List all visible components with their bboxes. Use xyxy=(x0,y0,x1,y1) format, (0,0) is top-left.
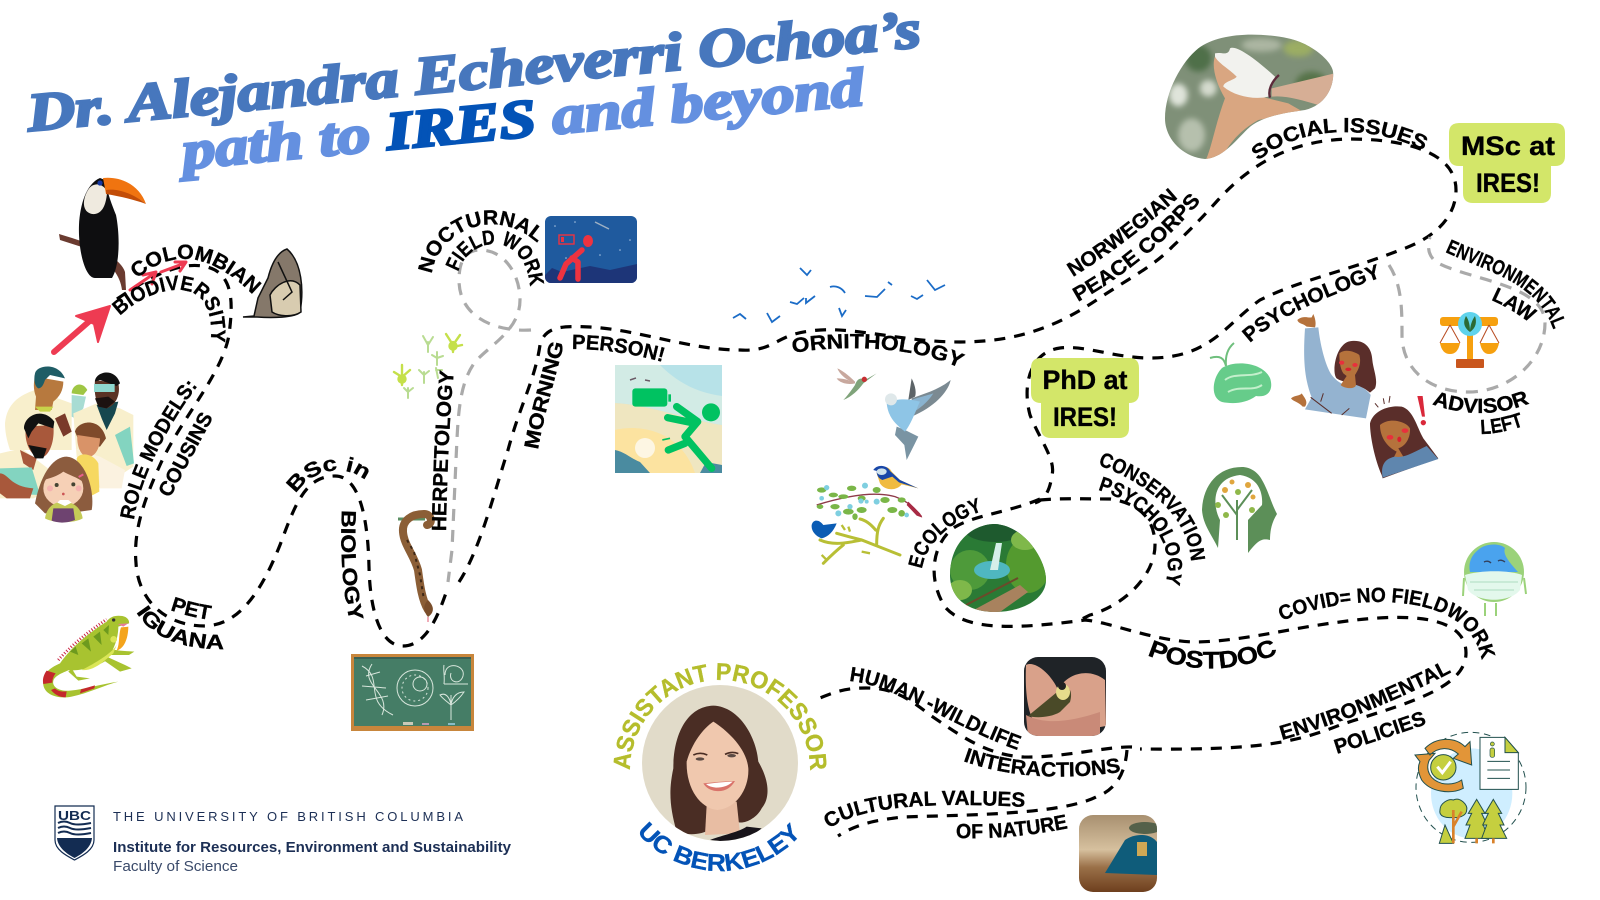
icon: scales of justice xyxy=(1440,312,1499,368)
icon: hummingbird xyxy=(837,368,877,400)
figure: surprised woman xyxy=(1370,396,1438,478)
label: PhD at IRES xyxy=(1031,358,1139,438)
labels along the path: PET xyxy=(171,596,212,620)
labels along the path: COLOMBIAN xyxy=(131,244,262,294)
labels along the path: COUSINS xyxy=(160,412,212,496)
labels along the path: HUMAN -WILDLIFE xyxy=(850,666,1022,750)
icon: exclamation mark xyxy=(1417,396,1426,425)
labels along the path: COVID= NO FIELDWORK xyxy=(1278,588,1496,660)
image: waterfall xyxy=(950,524,1046,612)
arrow: big red xyxy=(54,262,186,352)
image: bird in hands xyxy=(1024,657,1106,736)
label: MSc at IRES: MSc at xyxy=(1461,131,1555,161)
labels along the path: PSYCHOLOGY xyxy=(1098,476,1182,586)
labels along the path: ENVIRONMENTAL xyxy=(1446,239,1564,330)
icon: tree head xyxy=(1202,467,1277,553)
labels along the path: BSc in xyxy=(286,456,369,492)
faculty: Faculty of Science xyxy=(113,858,238,875)
icon: toucan xyxy=(59,178,146,290)
illustration: birds on branch xyxy=(812,466,922,563)
labels along the path: OF NATURE xyxy=(956,814,1068,838)
shield xyxy=(55,806,94,860)
labels along the path: ECOLOGY xyxy=(908,498,978,568)
label: UC Berkeley: UC BERKELEY xyxy=(640,822,798,872)
shield: UBC xyxy=(58,808,92,823)
icon: anteater xyxy=(243,249,302,317)
labels along the path: FIELD WORK xyxy=(445,230,544,287)
icon: chalkboard xyxy=(351,654,474,731)
labels along the path: NOCTURNAL xyxy=(418,210,540,273)
icon: earth with mask xyxy=(1463,542,1526,616)
icon: iguana xyxy=(43,616,134,697)
portrait: Alejandra xyxy=(640,683,800,843)
image: nocturnal fieldwork xyxy=(545,216,637,283)
title xyxy=(23,0,923,181)
labels along the path: ADVISOR xyxy=(1432,392,1530,414)
image: raised hands xyxy=(1165,34,1334,159)
labels along the path: CONSERVATION xyxy=(1100,453,1206,561)
labels along the path: BIODIVERSITY xyxy=(111,275,226,342)
labels along the path: LEFT xyxy=(1481,412,1520,434)
labels along the path: LAW xyxy=(1492,287,1538,321)
arrow: small red 1 xyxy=(130,272,156,290)
institute name: Institute for Resources, Environment and Sustainability xyxy=(113,839,512,856)
labels along the path: INTERACTIONS xyxy=(964,748,1120,777)
figure: woman raising hand xyxy=(1291,314,1376,418)
icon: snake on branch xyxy=(398,514,433,622)
labels along the path xyxy=(111,118,1564,838)
labels along the path: POSTDOC xyxy=(1148,640,1276,669)
labels along the path: PEACE CORPS xyxy=(1072,194,1199,302)
arrow: small red 2 xyxy=(161,262,186,272)
label: MSc at IRES: IRES! xyxy=(1476,168,1540,198)
labels along the path: PERSON! xyxy=(573,334,665,362)
icon: flying birds xyxy=(733,268,945,322)
labels along the path: ENVIRONMENTAL xyxy=(1279,663,1452,740)
labels along the path: PSYCHOLOGY xyxy=(1242,264,1377,342)
label: PhD at IRES: PhD at xyxy=(1042,365,1128,395)
image: morning person xyxy=(615,365,722,473)
labels along the path: BIOLOGY xyxy=(340,511,364,619)
university name: THE UNIVERSITY OF BRITISH COLUMBIA xyxy=(113,809,463,824)
labels along the path: HERPETOLOGY xyxy=(432,370,454,530)
icon: frog footprints xyxy=(394,334,462,398)
label: assistant professor: ASSISTANT PROFESSOR xyxy=(614,663,826,771)
dashed career path xyxy=(117,139,1545,836)
icon: blue parakeet xyxy=(885,378,951,460)
labels along the path: ORNITHOLOGY xyxy=(792,334,966,366)
title line 2: path to IRES and beyond xyxy=(175,57,867,181)
labels along the path: NORWEGIAN xyxy=(1066,188,1178,277)
title line 1: Dr. Alejandra Echeverri Ochoa’s xyxy=(23,0,923,143)
labels along the path: SOCIAL ISSUES xyxy=(1252,118,1428,159)
labels along the path: CULTURAL VALUES xyxy=(824,790,1024,826)
icon: policy and trees xyxy=(1415,732,1526,843)
illustration: role models group xyxy=(0,366,134,523)
labels along the path: ROLE MODELS: xyxy=(120,380,197,519)
labels along the path: IGUANA xyxy=(136,605,224,650)
label: PhD at IRES: IRES! xyxy=(1053,402,1117,432)
icon: sprout brain xyxy=(1210,343,1271,403)
logo: UBC xyxy=(55,806,512,875)
image: tent xyxy=(1079,815,1161,892)
label: MSc at IRES xyxy=(1449,123,1565,203)
labels along the path: POLICIES xyxy=(1334,712,1426,754)
labels along the path: MORNING xyxy=(524,342,563,449)
